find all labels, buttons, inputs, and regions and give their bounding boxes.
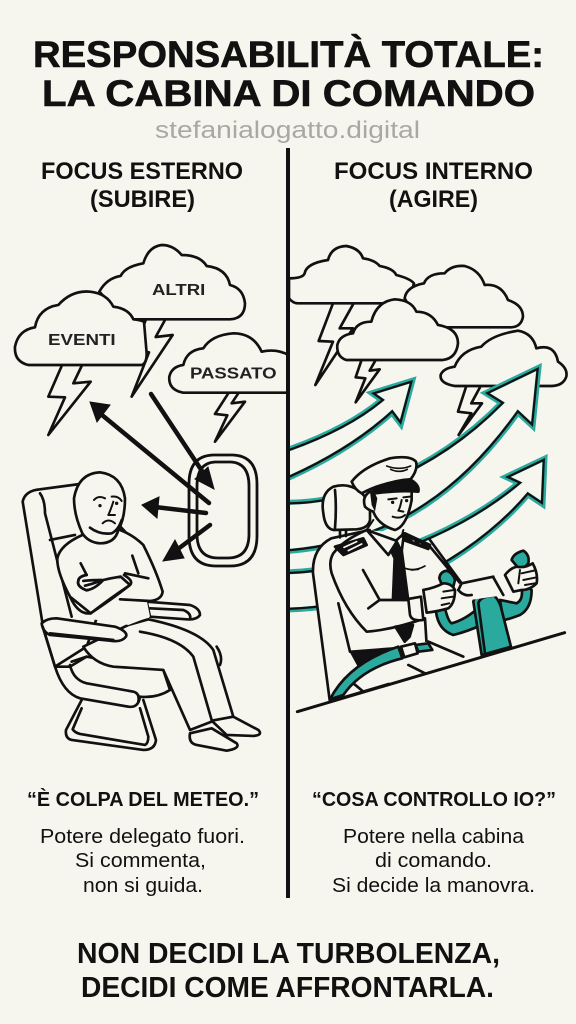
head [74,472,125,543]
cloud three [337,299,458,360]
shoes [190,717,260,751]
seat cushion [55,657,170,707]
heading: focus interno: (AGIRE) [389,186,478,213]
arrow: down left [163,525,210,561]
footer statement: DECIDI COME AFFRONTARLA. [81,972,494,1004]
title [33,34,544,114]
quote right: “COSA CONTROLLO IO?” [312,789,556,811]
heading: focus interno [334,158,533,213]
legs [83,619,233,730]
cloud: altri [99,245,245,319]
heading: focus esterno: (SUBIRE) [90,186,195,213]
pin [405,566,425,570]
left grip [439,571,455,588]
arrow three [280,458,545,610]
website watermark: stefanialogatto.digital [155,117,420,144]
teal belt end [416,643,432,652]
label: altri: ALTRI [152,282,205,299]
rear armrest [147,602,200,619]
cloud: eventi [15,291,147,365]
heading: focus esterno: FOCUS ESTERNO [41,158,243,185]
body right [332,826,535,897]
caption: left panel [27,788,259,897]
seat back [23,484,127,667]
sleeve cuff [408,597,423,620]
title: RESPONSABILITÀ TOTALE: [33,34,544,75]
cloud: passato [169,333,288,393]
yoke column [473,591,511,655]
icon: lightning altri [132,320,173,397]
shoulder line [405,535,463,587]
seat legs [66,700,156,750]
sad face [94,497,122,523]
body left: Potere delegato fuori. [40,826,245,848]
label: passato: PASSATO [190,365,277,382]
panel: storm clouds left [15,245,288,442]
front armrest [42,618,126,641]
label: eventi: EVENTI [48,332,116,349]
cloud four [441,331,567,386]
icon: lightning passato [215,393,245,442]
right arm [458,577,505,600]
heading: focus esterno [41,158,243,213]
icon: lightning eventi [48,366,91,435]
torso with crossed arms [57,530,163,625]
face [364,487,412,530]
right grip [512,551,529,582]
pilot cap [352,457,416,493]
quote left: “È COLPA DEL METEO.” [27,788,259,811]
heading: focus interno: FOCUS INTERNO [334,158,533,185]
panel: storm clouds right [289,246,567,435]
necktie [388,542,413,642]
icon: lightning three [458,386,482,435]
footer statement: NON DECIDI LA TURBOLENZA, [77,938,500,970]
arrows from window [90,394,214,561]
cloud two [405,266,523,327]
body left: Si commenta, [75,850,206,872]
centre divider [286,148,290,898]
caption: right panel [312,789,556,897]
pilot belt [351,648,395,665]
arrow two [280,367,539,552]
icon: lightning one [315,303,354,385]
teal sash [330,647,402,699]
arrow: to eventi [90,402,209,503]
footer statement [77,938,500,1004]
teal arrows [280,367,545,610]
arrow: to person [142,497,206,518]
icon: airplane window [189,455,257,566]
epaulettes [335,533,430,555]
panel: pilot at controls [297,457,565,712]
icon: lightning two [356,361,380,402]
shirt body [331,530,463,652]
panel: passenger in seat [23,472,260,751]
body right: Potere nella cabina [343,826,525,848]
belt buckle [401,643,418,657]
dashboard line [297,633,565,712]
left hand [423,583,455,613]
body right: Si decide la manovra. [332,875,535,897]
trousers [330,642,465,700]
title: LA CABINA DI COMANDO [42,73,535,114]
body left: non si guida. [83,875,203,897]
body left [40,826,245,897]
body right: di comando. [375,850,492,872]
collar [367,530,404,555]
right hand [505,563,537,592]
yoke wheel [436,607,482,635]
cloud one [289,246,414,303]
arrow one [280,380,413,482]
arrow: to window [151,394,214,489]
headrest [323,485,370,530]
pilot seat [313,530,388,700]
